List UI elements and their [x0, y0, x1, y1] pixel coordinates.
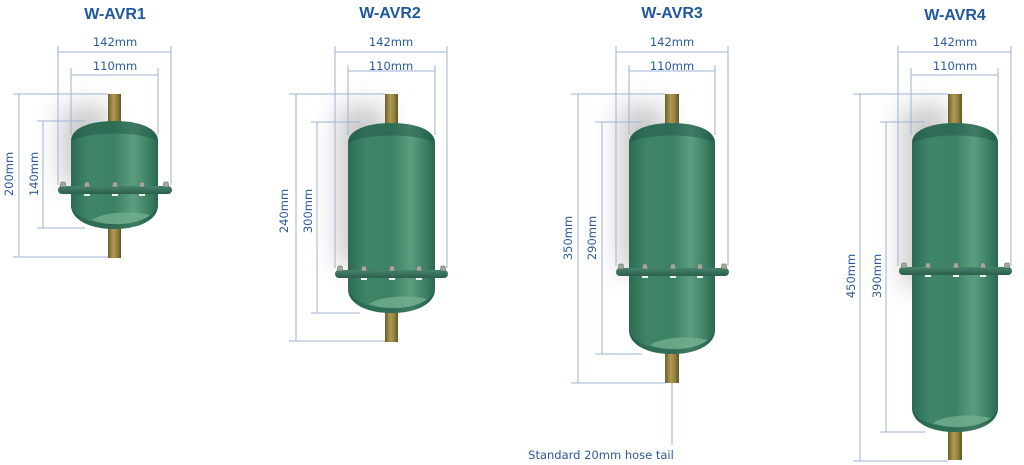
dimension: height 390mm: 390mm	[870, 254, 884, 298]
dimension: height 200mm: 200mm	[2, 152, 16, 196]
vessel	[335, 94, 448, 342]
dimension: height 450mm: 450mm	[844, 254, 858, 298]
dimension: height 350mm	[561, 94, 665, 383]
vessel	[899, 94, 1012, 460]
vessel	[616, 94, 729, 383]
unit: W-AVR1	[2, 6, 172, 258]
dimension: height 140mm	[27, 121, 85, 228]
dimension: width 142mm	[898, 35, 1011, 266]
dimension: width 110mm	[71, 59, 158, 135]
dimension: width 142mm	[58, 35, 171, 185]
dimension: width 142mm: 142mm	[650, 35, 694, 49]
vessel	[58, 94, 172, 258]
dimension: height 240mm	[277, 94, 385, 341]
shadow	[620, 106, 665, 270]
unit: W-AVR2	[277, 5, 448, 342]
dimension: width 110mm: 110mm	[933, 59, 977, 73]
title: W-AVR3: W-AVR3	[641, 5, 703, 22]
dimension: width 110mm: 110mm	[650, 59, 694, 73]
dimension: height 140mm: 140mm	[27, 152, 41, 196]
dimension: height 350mm: 350mm	[561, 216, 575, 260]
callout: hose tail: Standard 20mm hose tail	[528, 448, 674, 462]
dimension: width 110mm	[911, 59, 998, 135]
dimension: height 450mm	[844, 94, 948, 461]
dimension: height 200mm	[2, 94, 108, 257]
dimension: height 290mm	[585, 122, 642, 354]
dimension: width 142mm	[335, 35, 447, 268]
dimension: width 110mm: 110mm	[93, 59, 137, 73]
unit: W-AVR3	[528, 5, 729, 462]
dimension: height 390mm	[870, 122, 925, 432]
title: W-AVR1: W-AVR1	[84, 6, 146, 23]
dimension: width 142mm: 142mm	[93, 35, 137, 49]
dimension: height 290mm: 290mm	[585, 216, 599, 260]
title: W-AVR4: W-AVR4	[924, 7, 986, 24]
dimension: width 142mm: 142mm	[369, 35, 413, 49]
dimension: width 110mm	[629, 59, 715, 135]
dimension: width 142mm	[616, 35, 728, 266]
shadow	[62, 106, 108, 185]
dimension: height 300mm	[301, 122, 360, 313]
shadow	[903, 106, 948, 285]
unit: W-AVR4	[844, 7, 1012, 461]
dimension: width 142mm: 142mm	[933, 35, 977, 49]
dimension: height 240mm: 240mm	[277, 189, 291, 233]
shadow	[339, 106, 385, 265]
dimension: width 110mm	[348, 59, 435, 135]
dimension: height 300mm: 300mm	[301, 189, 315, 233]
dimension: width 110mm: 110mm	[369, 59, 413, 73]
title: W-AVR2: W-AVR2	[359, 5, 421, 22]
